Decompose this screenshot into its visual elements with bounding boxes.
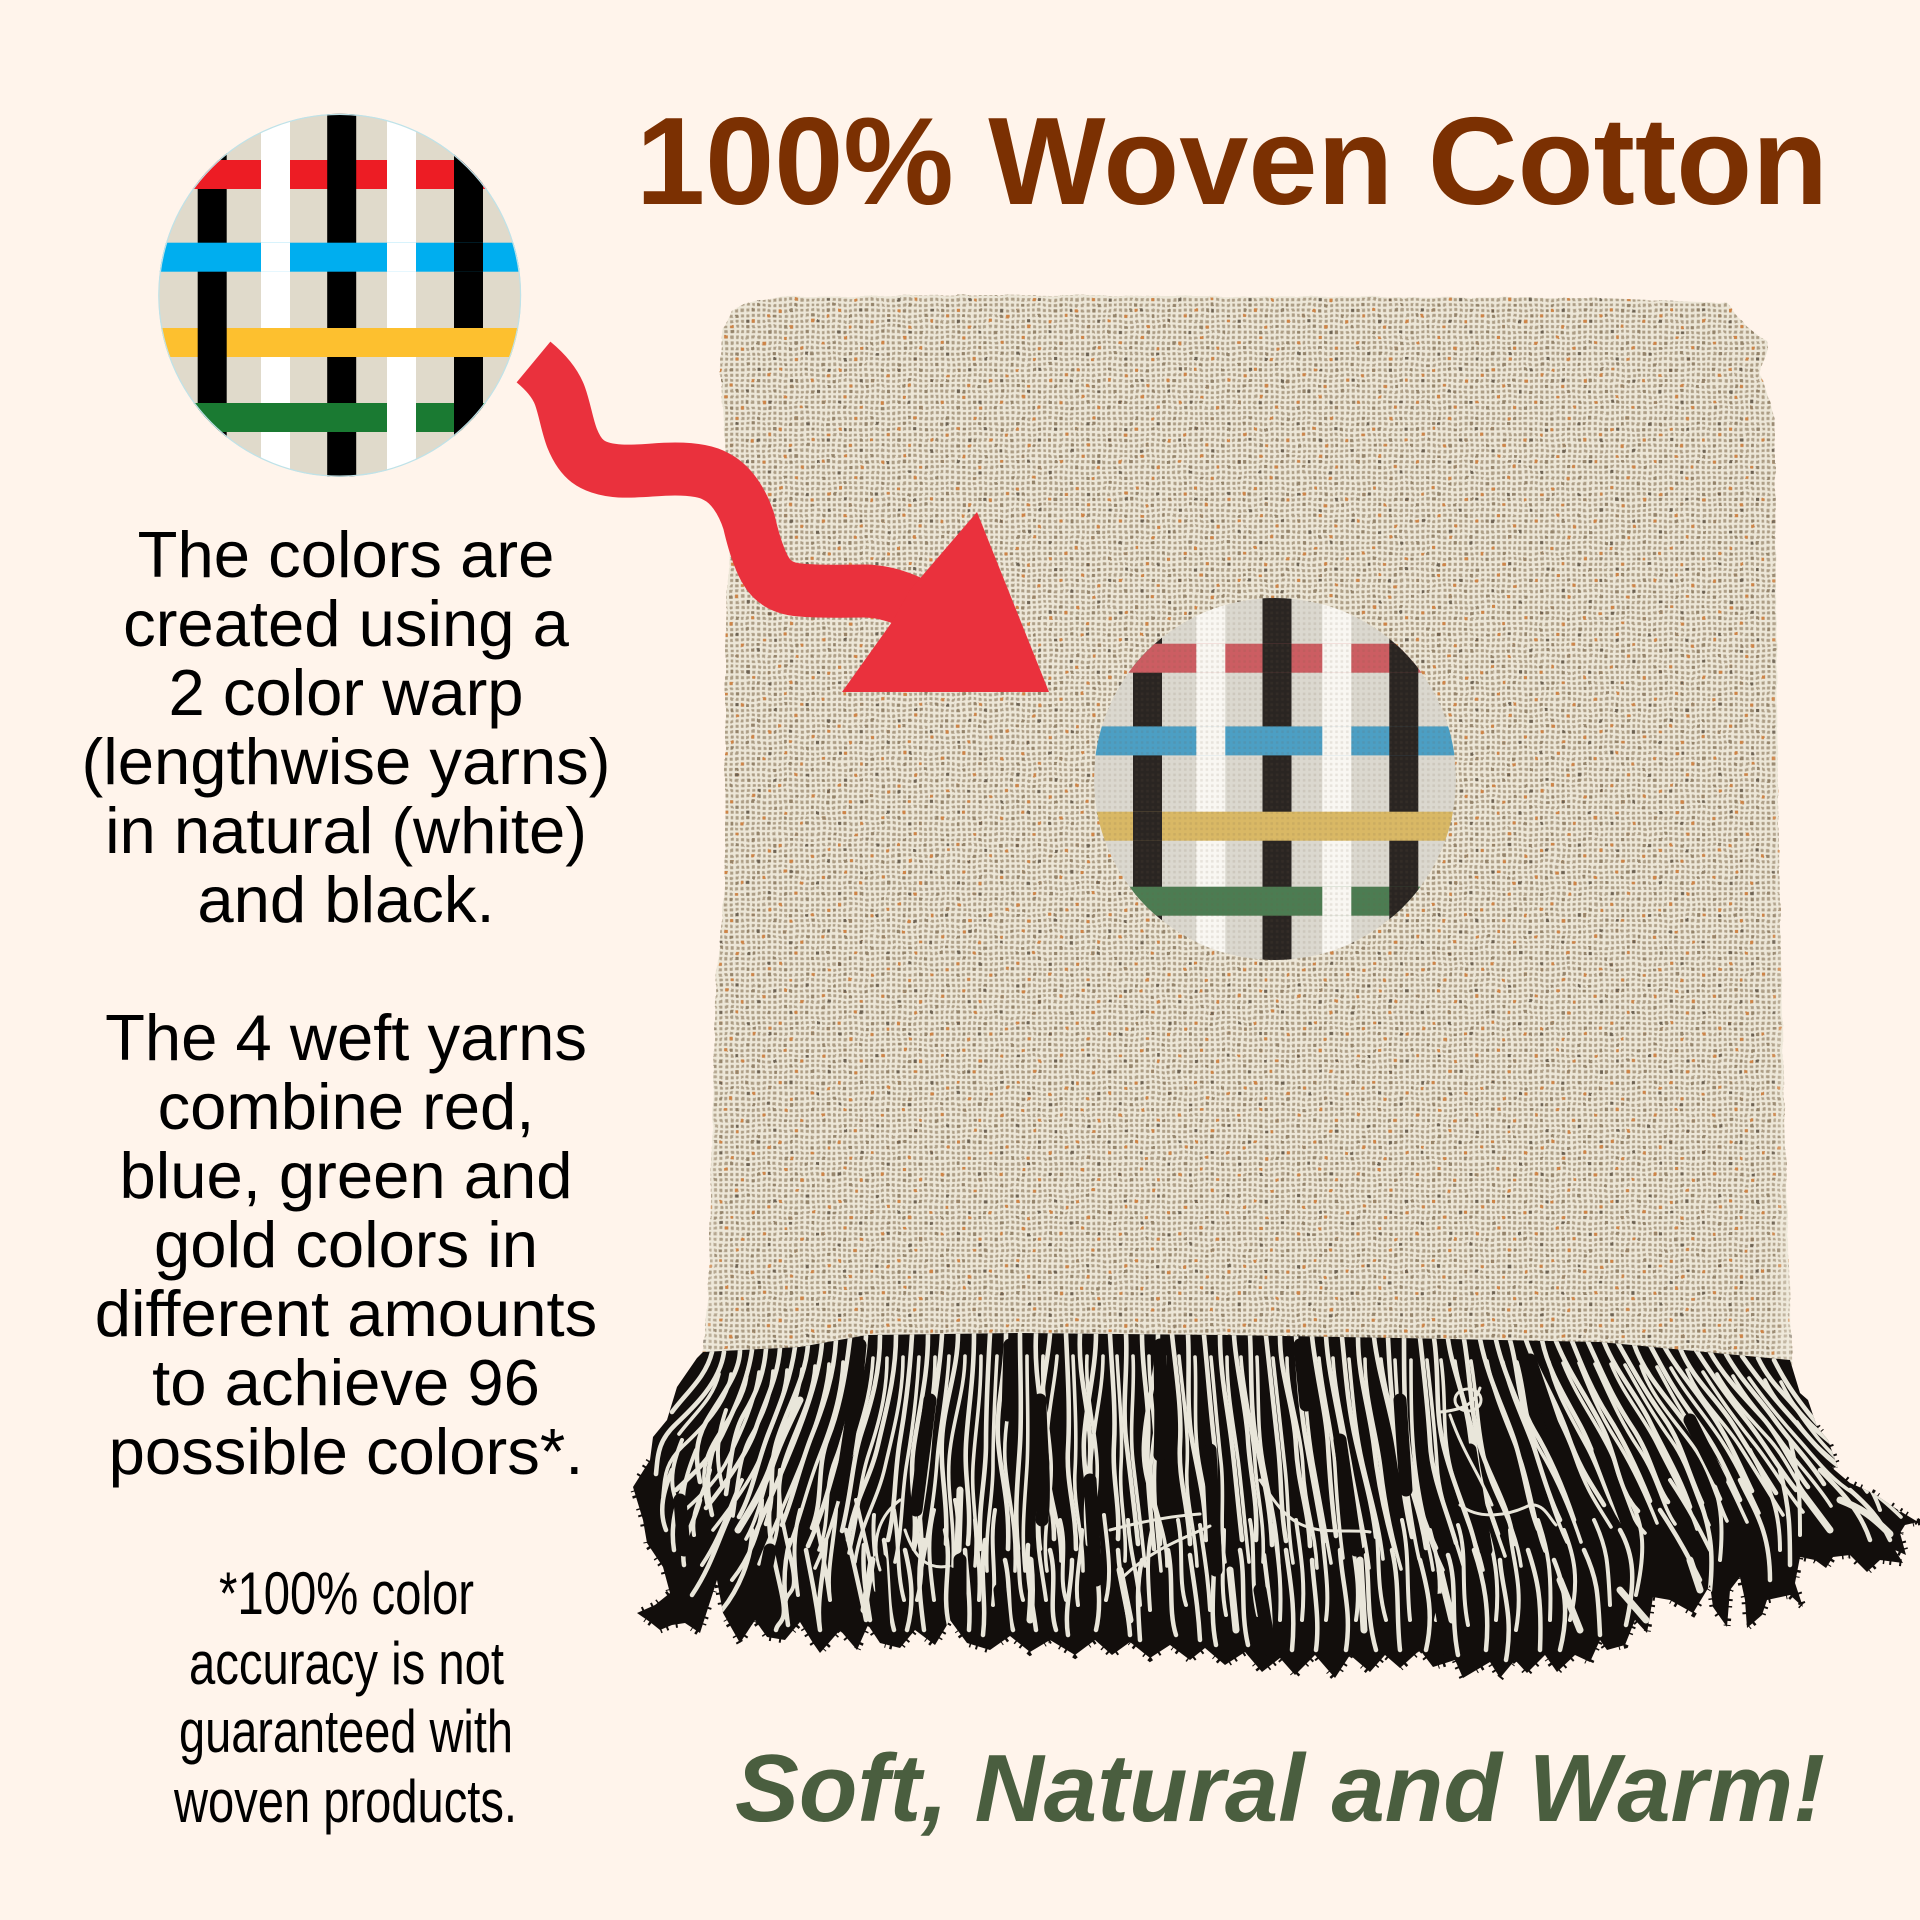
weft yarns on blanket [1085, 644, 1465, 916]
text block: warp description: (lengthwise yarns) [82, 725, 610, 798]
text block: warp description [82, 518, 610, 936]
text block: warp description: 2 color warp [168, 656, 524, 729]
blanket body [700, 295, 1792, 1370]
footnote [173, 1560, 517, 1835]
title: 100% Woven Cotton [636, 93, 1828, 231]
text block: warp description: created using a [123, 587, 570, 660]
footnote: accuracy is not [189, 1630, 504, 1697]
text block: weft description: different amounts [95, 1277, 597, 1350]
text block: weft description: combine red, [158, 1070, 534, 1143]
warp yarns [198, 110, 483, 480]
text block: weft description: possible colors*. [109, 1415, 583, 1488]
text block: weft description: to achieve 96 [152, 1346, 540, 1419]
weave swatch on blanket [1085, 594, 1465, 964]
footnote: guaranteed with [179, 1698, 513, 1765]
footnote: *100% color [219, 1560, 474, 1627]
tagline: Soft, Natural and Warm! [735, 1735, 1825, 1842]
text block: weft description: The 4 weft yarns [105, 1001, 587, 1074]
text block: weft description: gold colors in [154, 1208, 538, 1281]
text block: warp description: in natural (white) [105, 794, 587, 867]
weave swatch: zoomed yarn diagram [150, 110, 530, 480]
text block: warp description: and black. [197, 863, 495, 936]
text block: weft description: blue, green and [119, 1139, 573, 1212]
fringe [633, 1333, 1918, 1678]
text block: warp description: The colors are [138, 518, 554, 591]
red wavy arrow [534, 362, 1049, 692]
footnote: woven products. [173, 1768, 517, 1835]
weft yarns [150, 160, 530, 432]
warp yarns on blanket [1133, 594, 1418, 964]
text block: weft description [95, 1001, 597, 1488]
